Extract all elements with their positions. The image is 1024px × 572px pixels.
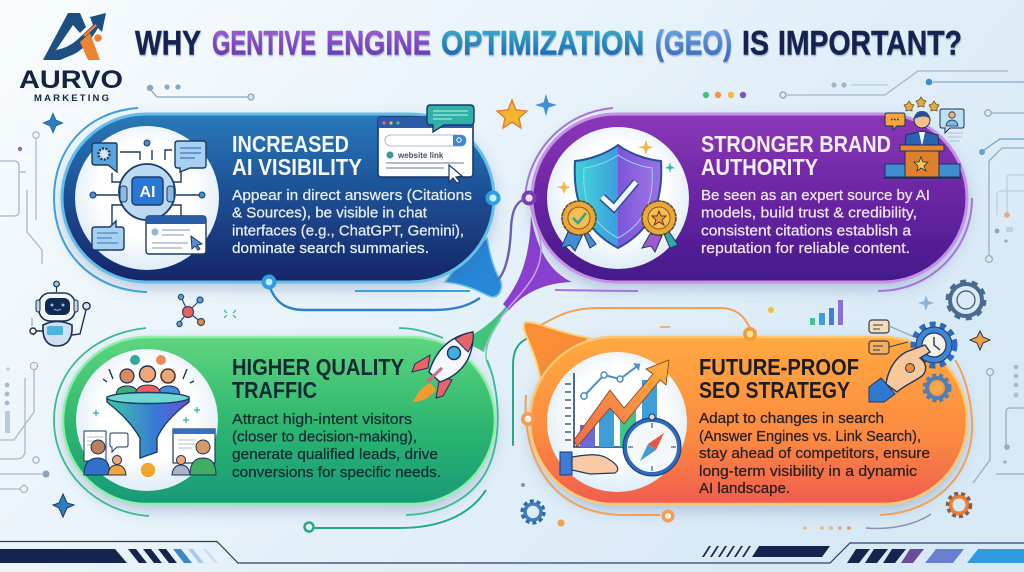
footer bar left [0, 542, 1024, 563]
icon: robot [30, 281, 90, 346]
heading: future-proof SEO strategy: FUTURE-PROOF [699, 354, 859, 380]
body text: stronger brand authority [701, 187, 930, 257]
title: ENGINE [326, 24, 431, 62]
icon: text bubble left [92, 221, 124, 250]
connector: purple tail [503, 215, 572, 310]
body text: future-proof SEO strategy: stay ahead of competitors, ensure [699, 445, 930, 462]
body text: higher quality traffic: (closer to decision-making), [232, 428, 417, 446]
icon: small sparkle marks [224, 310, 236, 318]
heading: higher quality traffic: HIGHER QUALITY [232, 354, 404, 380]
footer bar right [702, 546, 1024, 563]
circuit lines: top [147, 71, 1024, 100]
colored dots [703, 92, 746, 98]
icon: right viewers [172, 429, 216, 475]
title: WHY [135, 24, 201, 62]
icon: gear bottom left [522, 501, 544, 523]
node: orange left [521, 412, 535, 426]
logo: AURVO [19, 66, 123, 94]
icon: shield with check and medals [557, 140, 678, 252]
icon: gear bubble [92, 143, 117, 172]
icon: website link card [378, 105, 474, 183]
heading: increased AI visibility [232, 131, 362, 180]
icon: sparkle blue [535, 94, 557, 116]
icon: sparkle left [43, 113, 63, 133]
icon: funnel with people [93, 355, 200, 478]
icon: growth chart with compass [560, 360, 681, 476]
circuit lines: left [0, 132, 50, 493]
heading: stronger brand authority: STRONGER BRAND [701, 131, 891, 157]
heading: higher quality traffic [232, 354, 404, 403]
node: orange top [743, 327, 757, 341]
icon: text bubble right [175, 141, 206, 172]
body text: future-proof SEO strategy: (Answer Engines vs. Link Search), [699, 428, 921, 445]
body text: stronger brand authority: consistent citations establish a [701, 222, 912, 240]
body text: higher quality traffic: conversions for specific needs. [232, 464, 441, 481]
icon: left viewers [84, 431, 128, 475]
icon: sparkle bottom left [53, 494, 74, 517]
body text: higher quality traffic [232, 411, 441, 481]
heading: stronger brand authority: AUTHORITY [701, 154, 818, 180]
node: green with line [304, 490, 486, 532]
node: purple [522, 190, 536, 206]
connector lines [484, 198, 541, 445]
body text: increased AI visibility: interfaces (e.g., ChatGPT, Gemini), [232, 222, 464, 240]
icon: gear bottom right [948, 494, 970, 516]
logo: MARKETING [34, 93, 109, 104]
icon: gear top right [948, 282, 984, 318]
icon: speaker at podium [884, 97, 964, 178]
heading: future-proof SEO strategy [699, 354, 859, 403]
icon: AI head with circuits [90, 140, 205, 235]
body text: future-proof SEO strategy: long-term visibility in a dynamic [699, 463, 918, 480]
body text: higher quality traffic: generate qualified leads, drive [232, 446, 438, 463]
title [135, 24, 962, 62]
connector: blue tail [445, 238, 502, 297]
body text: increased AI visibility: dominate search summaries. [232, 240, 429, 257]
body text: stronger brand authority: reputation for reliable content. [701, 240, 910, 257]
icon: star [497, 100, 527, 128]
body text: increased AI visibility [232, 187, 472, 257]
body text: future-proof SEO strategy: AI landscape. [699, 480, 790, 497]
body text: stronger brand authority: models, build trust & credibility, [701, 204, 917, 222]
icon: website link card: website link [397, 151, 444, 160]
node: orange bottom [662, 510, 674, 522]
circuit lines: right [973, 110, 1024, 483]
node: blue bottom with line [262, 274, 480, 310]
heading: increased AI visibility: INCREASED [232, 131, 349, 157]
title: IMPORTANT? [778, 24, 962, 62]
body text: future-proof SEO strategy: Adapt to changes in search [699, 410, 884, 427]
body text: increased AI visibility: & Sources), be visible in chat [232, 204, 428, 222]
connector: green tail [462, 305, 510, 352]
icon: molecule [177, 294, 204, 327]
title: (GEO) [655, 24, 732, 62]
logo [19, 13, 123, 104]
title: OPTIMIZATION [441, 24, 644, 62]
body text: higher quality traffic: Attract high-intent visitors [232, 411, 412, 428]
heading: higher quality traffic: TRAFFIC [232, 377, 317, 403]
icon: browser with cursor [146, 216, 206, 254]
body text: increased AI visibility: Appear in direct answers (Citations [232, 187, 472, 204]
panel: future-proof SEO strategy [524, 308, 972, 515]
title: IS [742, 24, 769, 62]
icon: sparkle near gear [918, 295, 934, 311]
icon: sparkle right [970, 331, 990, 350]
panel: increased AI visibility [54, 105, 494, 292]
icon: mini bar chart [768, 300, 843, 325]
decorative dots and line [521, 483, 931, 530]
panel: stronger brand authority [525, 97, 972, 291]
node: blue right [486, 190, 500, 206]
title: GENTIVE [212, 24, 316, 62]
body text: stronger brand authority: Be seen as an expert source by AI [701, 187, 930, 204]
heading: future-proof SEO strategy: SEO STRATEGY [699, 377, 850, 403]
heading: stronger brand authority [701, 131, 891, 180]
icon: AI head with circuits: AI [140, 184, 156, 201]
heading: increased AI visibility: AI VISIBILITY [232, 154, 362, 180]
icon: hand turning gear [869, 320, 955, 402]
panel: higher quality traffic [54, 328, 498, 516]
icon: rocket [412, 332, 473, 402]
body text: future-proof SEO strategy [699, 410, 930, 497]
